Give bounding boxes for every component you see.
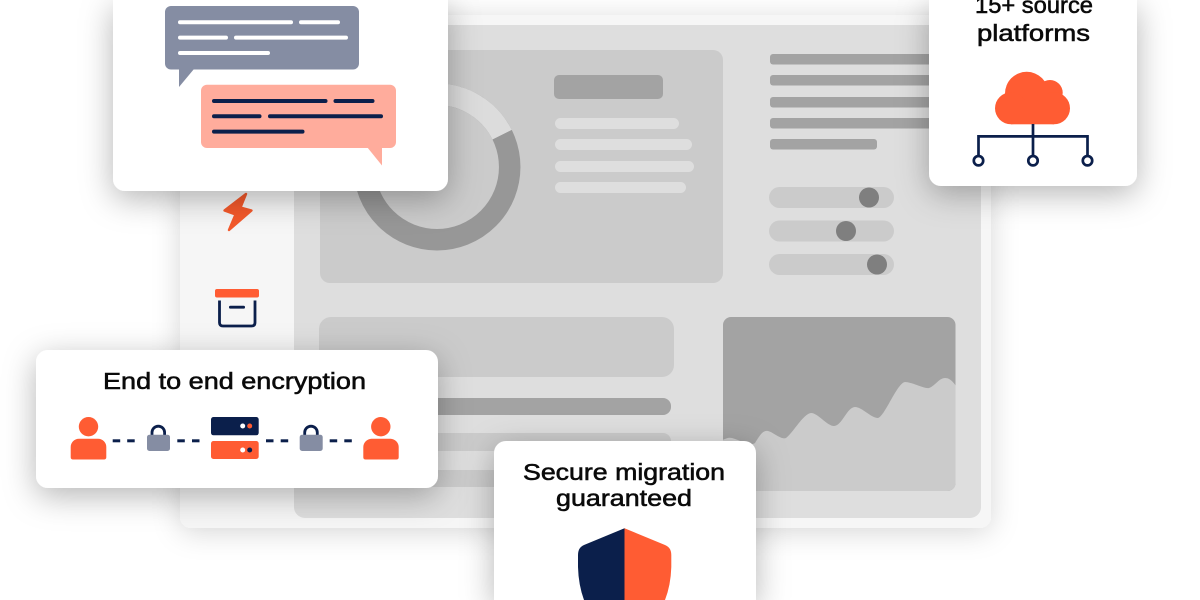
area chart [720,317,956,495]
card: secure migration [494,441,756,600]
text placeholder lines [555,118,694,193]
panel: dashboard window [180,15,991,528]
heading: secure migration guaranteed: guaranteed [556,485,692,511]
donut chart [364,94,510,240]
icon: coral speech bubble [201,85,396,166]
heading: 15+ source platforms [975,0,1093,46]
heading: end to end encryption: End to end encryption [103,368,366,394]
lower content placeholders [319,317,674,487]
heading: 15+ source platforms: platforms [977,20,1090,46]
heading: secure migration guaranteed [523,459,725,511]
heading placeholder [554,75,663,99]
icon: sender person [71,417,106,460]
card: source platforms [929,0,1137,186]
heading: secure migration guaranteed: Secure migration [523,459,725,485]
icon: server stack [211,417,259,459]
icon: grey speech bubble [165,6,359,87]
icon: receiver person [363,417,399,460]
right text placeholder lines [770,54,940,150]
panel: donut chart card [320,50,723,283]
connection dashes [113,439,352,442]
icon: cloud network [974,72,1092,165]
icon: padlock right [300,426,323,451]
icon: shield [578,528,671,600]
sidebar icon: lightning bolt [224,194,252,230]
card: chat messages [113,0,448,191]
icon: padlock left [147,426,170,451]
card: end to end encryption [36,350,438,488]
slider controls [769,187,894,275]
sidebar icon: archive box [215,289,259,326]
